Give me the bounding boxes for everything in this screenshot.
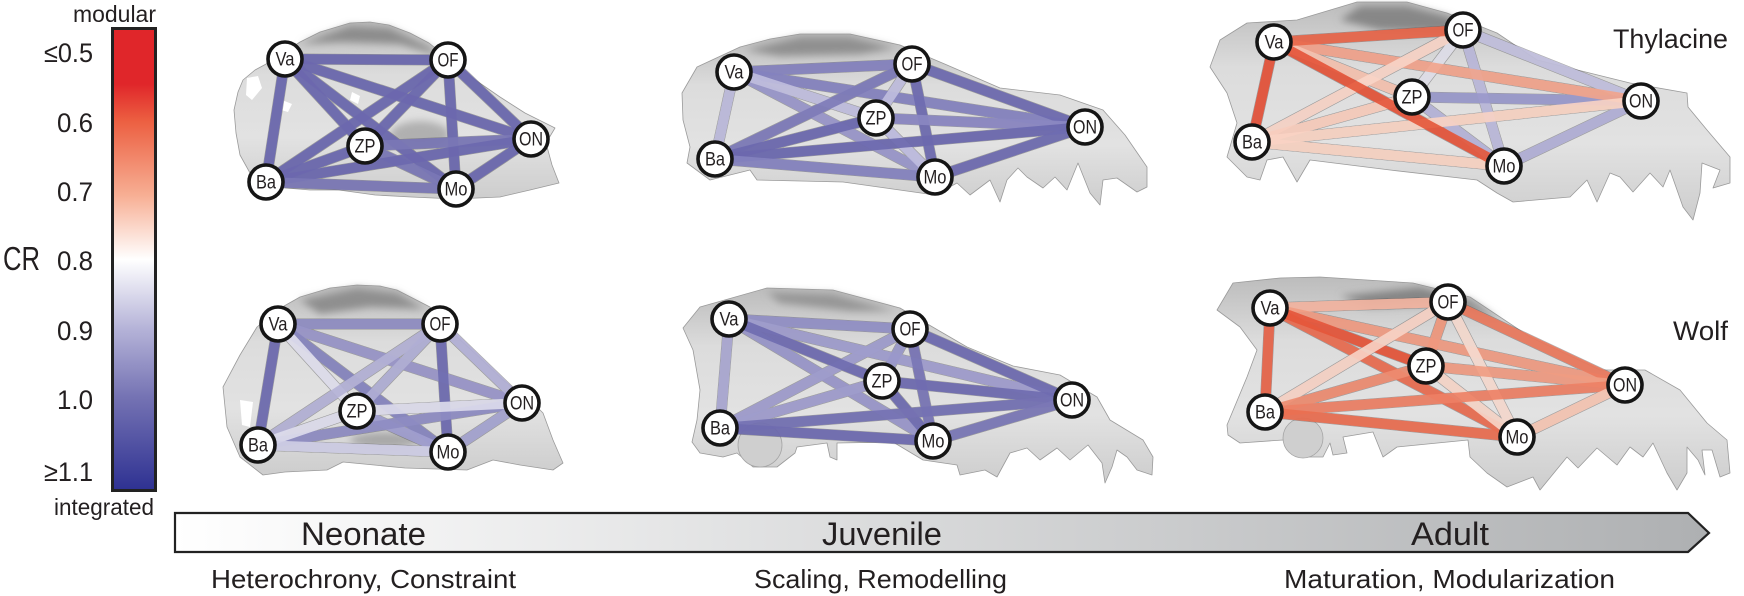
landmark nodes: ZP	[872, 372, 892, 392]
tick labels: 0.6	[57, 108, 93, 138]
landmark nodes: OF	[438, 50, 458, 72]
landmark nodes: Mo	[1506, 428, 1528, 448]
landmark nodes: Ba	[248, 436, 268, 456]
landmark nodes: Mo	[922, 432, 944, 452]
arrow shape	[175, 513, 1709, 552]
stage label: Adult: Adult	[1411, 516, 1489, 552]
landmark nodes	[698, 47, 1102, 194]
landmark nodes: ON	[1073, 118, 1097, 138]
landmark nodes	[1235, 13, 1658, 183]
row label: Wolf: Wolf	[1673, 316, 1729, 346]
landmark nodes: Va	[724, 62, 744, 84]
landmark nodes: OF	[430, 314, 450, 336]
landmark nodes: ON	[1060, 390, 1084, 412]
landmark nodes: Mo	[436, 442, 460, 464]
landmark nodes: Va	[1260, 298, 1280, 320]
process label: Maturation, Modularization: Maturation, Modularization	[1284, 564, 1615, 594]
panel: wolf juvenile	[683, 288, 1153, 483]
landmark nodes: Ba	[710, 418, 730, 440]
landmark nodes: ZP	[1402, 88, 1422, 108]
landmark nodes: Mo	[1492, 156, 1516, 178]
landmark nodes: ON	[1629, 92, 1653, 112]
landmark nodes: Va	[276, 50, 295, 70]
landmark nodes: ZP	[866, 108, 886, 130]
landmark nodes	[241, 307, 539, 469]
landmark nodes: ON	[510, 394, 534, 414]
landmark nodes: ON	[1613, 376, 1637, 396]
process label: Scaling, Remodelling: Scaling, Remodelling	[754, 564, 1007, 594]
arrow: developmental timeline	[175, 513, 1709, 552]
row label: Thylacine: Thylacine	[1613, 24, 1728, 54]
panel: wolf neonate	[223, 285, 563, 475]
label: integrated: integrated	[54, 494, 154, 520]
landmark nodes: OF	[902, 54, 922, 76]
panel: wolf adult	[1217, 277, 1730, 490]
landmark nodes: Mo	[924, 168, 946, 188]
landmark nodes	[1248, 285, 1642, 454]
panel: thylacine juvenile	[682, 34, 1147, 205]
skull	[1210, 2, 1730, 220]
colour bar	[112, 28, 156, 490]
stage label: Neonate: Neonate	[301, 516, 426, 552]
landmark nodes	[703, 302, 1089, 458]
landmark nodes: Va	[268, 314, 288, 336]
process label: Heterochrony, Constraint: Heterochrony, Constraint	[211, 564, 517, 594]
skull	[223, 285, 563, 475]
landmark nodes: OF	[1438, 292, 1458, 314]
stage label: Juvenile: Juvenile	[822, 516, 942, 552]
panel: thylacine adult	[1210, 2, 1730, 220]
network edges	[1252, 30, 1641, 166]
tick labels: ≤0.5	[44, 38, 93, 68]
landmark nodes: Va	[1264, 32, 1284, 54]
landmark nodes: Ba	[1255, 402, 1275, 424]
landmark nodes: ZP	[354, 136, 376, 158]
tick labels: 0.7	[57, 177, 93, 207]
landmark nodes	[249, 42, 548, 206]
skull	[682, 34, 1147, 205]
landmark nodes: Va	[720, 310, 739, 330]
landmark nodes: OF	[900, 320, 920, 340]
landmark nodes: Mo	[444, 180, 468, 200]
colour legend: CR scale	[3, 1, 156, 520]
landmark nodes: ZP	[346, 402, 368, 422]
network edges	[715, 64, 1085, 177]
skull	[1217, 277, 1730, 490]
landmark nodes: ON	[519, 130, 543, 150]
landmark nodes: OF	[1452, 20, 1474, 42]
skull	[234, 22, 559, 199]
network edges	[258, 324, 522, 452]
landmark nodes: Ba	[256, 172, 276, 194]
tick labels: 0.9	[57, 316, 93, 346]
tick labels: 0.8	[57, 246, 93, 276]
tick labels: ≥1.1	[44, 457, 93, 487]
axis label: CR: CR	[3, 240, 40, 277]
landmark nodes: ZP	[1416, 356, 1436, 378]
landmark nodes: Ba	[705, 150, 725, 170]
network edges	[266, 59, 531, 189]
network edges	[720, 319, 1072, 441]
landmark nodes: Ba	[1242, 132, 1262, 154]
skull	[683, 288, 1153, 483]
network edges	[1265, 302, 1625, 437]
panel: thylacine neonate	[234, 22, 559, 206]
label: modular: modular	[73, 1, 156, 27]
tick labels: 1.0	[57, 385, 93, 415]
tick labels	[44, 38, 93, 487]
